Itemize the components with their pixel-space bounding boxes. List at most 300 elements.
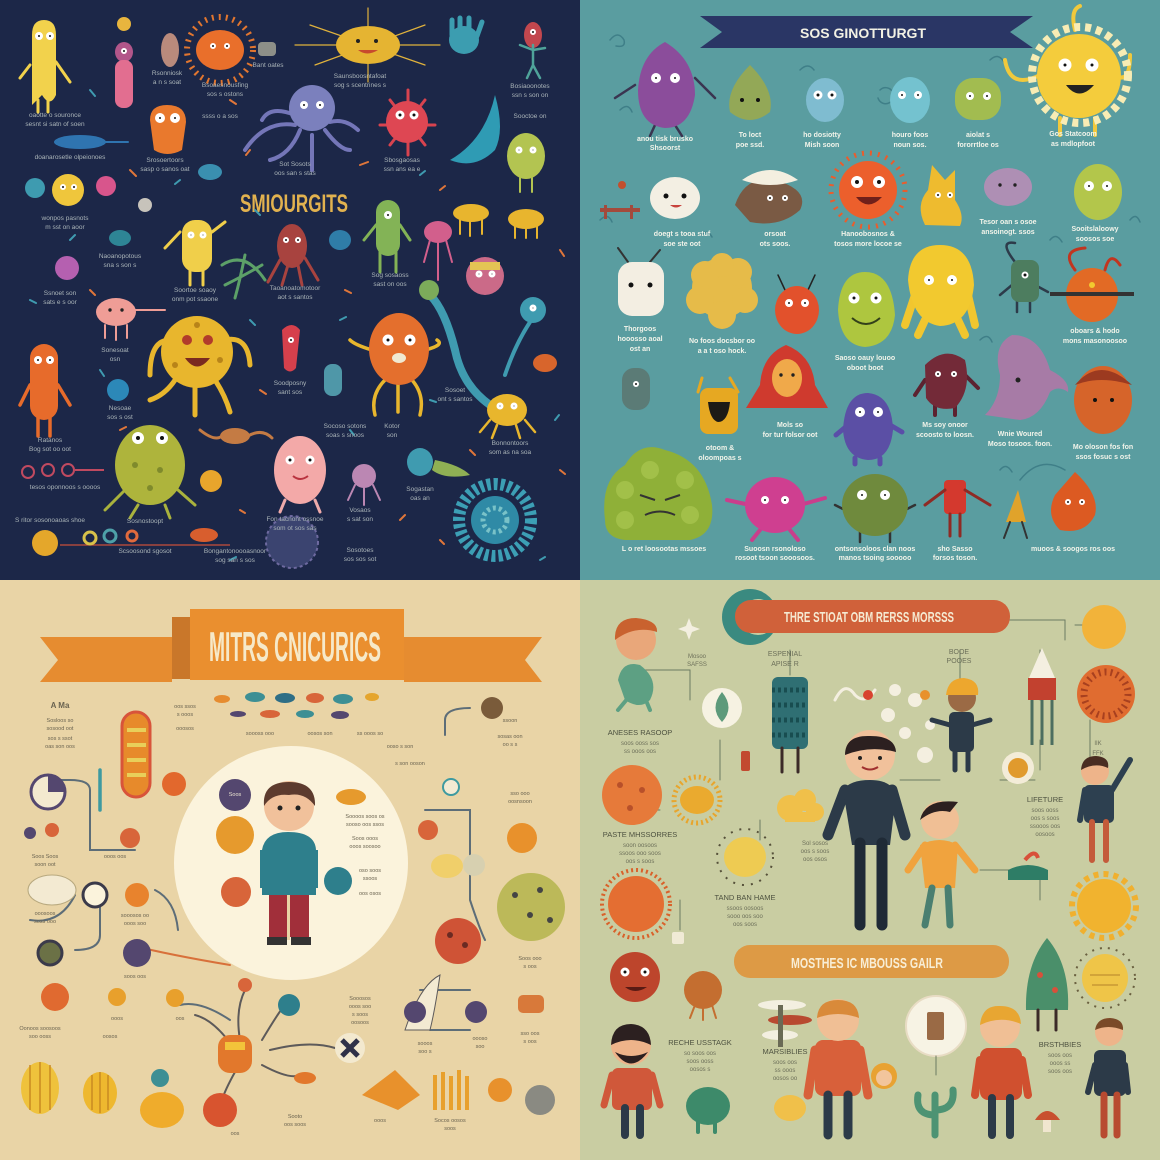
text labels: dark panel: Kotor xyxy=(384,423,401,430)
text labels: sage panel: BOOE xyxy=(949,649,969,656)
text labels: tan panel: s oos xyxy=(523,1039,537,1045)
text labels: dark panel: ont s santos xyxy=(437,396,473,403)
text labels: teal panel: otoom & xyxy=(706,445,734,452)
text labels: dark panel: Sot Sosots xyxy=(279,161,311,168)
section pill xyxy=(734,945,1009,978)
text labels: dark panel: Taoanoatomotoor xyxy=(270,285,321,292)
person: small orange hair xyxy=(932,678,990,770)
text labels: dark panel: Fon tacnont ossnoe xyxy=(266,516,324,523)
monster: big yellow cheese xyxy=(150,316,250,415)
text labels: sage panel: oosos s xyxy=(690,1067,710,1073)
text labels: dark panel: sesnt si satn of soen xyxy=(25,121,85,128)
text labels: teal panel: oboars & hodo xyxy=(1070,328,1120,335)
text labels: sage panel: ESPENIAL xyxy=(768,651,802,658)
panel: teal monsters xyxy=(580,0,1160,580)
microbe: orange sun xyxy=(187,17,253,83)
text labels: dark panel: Bosiaoonotes xyxy=(510,83,550,90)
small orange blob right xyxy=(533,354,557,372)
text labels: tan panel: ooso s son xyxy=(387,744,413,750)
microbe: blue small xyxy=(329,230,351,250)
monster: green square xyxy=(955,78,1001,120)
text labels: sage panel: oosoos xyxy=(1035,832,1055,838)
monster: yellow black-mouth xyxy=(698,378,738,434)
text labels: tan panel: oosos xyxy=(103,1034,118,1040)
monster: golden cluster xyxy=(686,253,758,329)
icon: green bowl xyxy=(1008,853,1048,880)
text labels: teal panel: L o ret loosootas mssoes xyxy=(622,546,706,553)
text labels: dark panel: Bsoaesnousfing xyxy=(202,82,249,89)
text labels: sage panel: BRSTHBIES xyxy=(1039,1040,1081,1049)
text labels: dark panel: som ot sos sas xyxy=(273,525,317,532)
text labels: dark panel: Bonnontoors xyxy=(492,440,529,447)
text labels: tan panel: ooosos xyxy=(176,726,194,732)
text labels: dark panel: Sonesoat xyxy=(101,347,129,354)
monster: green big grin xyxy=(838,272,895,347)
text labels: sage panel: ssoos ooo soos xyxy=(619,851,661,857)
microbe: yellow sunburst right xyxy=(1072,874,1136,938)
microbe: teal curved xyxy=(450,95,500,163)
text labels: tan panel: ssoos xyxy=(363,876,377,882)
title: SMIOURGITS: SMIOURGITS xyxy=(240,190,348,218)
text labels: dark panel: S ritor sosonoaoas shoe xyxy=(15,517,85,524)
text labels: tan panel: ooos soo xyxy=(349,1004,371,1010)
figure: red tower xyxy=(1028,648,1056,745)
monster: red small xyxy=(282,325,300,372)
text labels: dark panel: Sosotoes xyxy=(346,547,374,554)
text labels: dark panel: aot s santos xyxy=(277,294,313,301)
text labels: tan panel: Socos oosos xyxy=(434,1118,466,1124)
microbe: brown fuzzy xyxy=(684,971,722,1020)
text labels: dark panel: Bog sot oo oot xyxy=(29,446,71,453)
person: man with blue sweater xyxy=(1088,1018,1128,1135)
microbe: golden oval xyxy=(295,8,440,82)
text labels: tan panel: ooos oos xyxy=(104,854,126,860)
nest: dark blue tangle xyxy=(266,516,318,568)
monster: lilac trunk xyxy=(985,335,1068,420)
text labels: tan panel: soon oot xyxy=(34,862,56,868)
badge: drink icon xyxy=(906,996,966,1075)
text labels: teal panel: Sooitslaloowy xyxy=(1071,226,1119,233)
text labels: tan panel: ooosoos xyxy=(35,911,56,917)
text labels: teal panel: orsoat xyxy=(764,231,786,238)
sun: yellow circle xyxy=(1082,605,1126,649)
squiggle cluster xyxy=(835,684,935,763)
text labels: teal panel: soosos soe xyxy=(1076,236,1114,243)
text labels: sage panel: RECHE USSTAGK xyxy=(668,1038,732,1047)
text labels: dark panel: soas s snoos xyxy=(326,432,365,439)
text labels: dark panel: oaotte o souronce xyxy=(29,112,81,119)
monster: orange round xyxy=(150,105,186,154)
panel: tan human body microbes xyxy=(0,580,580,1160)
monster: white xyxy=(650,177,700,219)
section pill: MOSTHES IC MBOUSS GAILR xyxy=(791,955,943,972)
text labels: teal panel: poe ssd. xyxy=(736,142,764,149)
title banner xyxy=(700,16,1033,48)
text labels: teal panel: hooosso aoal xyxy=(617,336,663,343)
text labels: teal panel: manos tsoing sooooo xyxy=(839,555,911,562)
text labels: teal panel: oloompoas s xyxy=(698,455,742,462)
person: boy orange xyxy=(908,801,975,925)
small head badge xyxy=(871,1063,897,1089)
text labels: teal panel: Shsoorst xyxy=(650,145,681,152)
monster: pink round xyxy=(466,257,504,295)
monster: pink spiky xyxy=(727,477,825,540)
text labels: teal panel: a a t oso hock. xyxy=(698,348,746,355)
text labels: sage panel: soon oosoos xyxy=(623,843,657,849)
text labels: teal panel: Mo oloson fos fon xyxy=(1073,444,1133,451)
monster: tall pink xyxy=(115,17,133,108)
text labels: dark panel: Naoanopotous xyxy=(99,253,142,260)
monster: orange furry xyxy=(1074,366,1132,434)
monster: lilac small xyxy=(348,464,380,505)
text labels: teal panel: ansoinogt. ssos xyxy=(981,229,1035,236)
person: orange shirt man xyxy=(808,999,868,1135)
text labels: dark panel: onm pot ssaone xyxy=(172,296,219,303)
panel: sage people and microbes xyxy=(580,580,1160,1160)
text labels: sage panel: TAND BAN HAME xyxy=(714,893,776,902)
monster: teal textured xyxy=(772,677,808,772)
text labels: tan panel: ooos soo xyxy=(124,921,146,927)
text labels: dark panel: Nesoae xyxy=(109,405,132,412)
figure: mushroom stack xyxy=(758,1000,812,1047)
panel: dark navy microbes xyxy=(0,0,580,580)
text labels: tan panel: Sooto xyxy=(288,1114,302,1120)
text labels: tan panel: sooso oos ssos xyxy=(346,822,384,828)
monster: small dark bottle xyxy=(622,368,650,410)
text labels: dark panel xyxy=(15,62,550,564)
text labels: dark panel: son xyxy=(387,432,398,439)
text labels: dark panel: Bongantonoooasnoor xyxy=(204,548,267,555)
text labels: tan panel: s son ooson xyxy=(395,761,425,767)
bacterium: blue capsule xyxy=(54,135,128,149)
text labels: sage panel: APISE R xyxy=(771,661,799,668)
monster: green oval xyxy=(507,133,545,192)
text labels: dark panel: Rsonniosk xyxy=(152,70,183,77)
text labels: sage panel: soos ooss xyxy=(1031,808,1059,814)
title pill top xyxy=(722,589,1010,645)
right lower microbes xyxy=(404,975,555,1115)
text labels: dark panel: wonpos pasnots xyxy=(41,215,89,222)
text labels: tan panel: A Ma xyxy=(51,701,70,710)
monster: red cape xyxy=(746,345,828,408)
text labels: tan panel: sooos xyxy=(418,1041,433,1047)
text labels: teal panel: Tesor oan s osoe xyxy=(979,219,1037,226)
text labels: teal panel: rosoot tsoon sooosoos. xyxy=(735,555,815,562)
text labels: dark panel: Sooctoe on xyxy=(514,113,547,120)
text labels: tan panel: Sosloos so xyxy=(47,718,73,724)
text labels: teal panel: doegt s tooa stuf xyxy=(654,231,711,238)
text labels: tan panel: s ooos xyxy=(177,712,193,718)
person: boy waving xyxy=(1080,756,1130,860)
person: central figure xyxy=(260,781,318,945)
text labels: dark panel: sats e s oor xyxy=(43,299,78,306)
text labels: sage panel: oos osos xyxy=(803,857,827,863)
text labels: dark panel: ssn s son on xyxy=(512,92,549,99)
text labels: dark panel: Socoso sotons xyxy=(324,423,367,430)
text labels: dark panel: sog san s sos xyxy=(215,557,256,564)
text labels: tan panel: soss ooo xyxy=(34,919,56,925)
text labels: tan panel: Oonoos soosoos xyxy=(19,1026,61,1032)
text labels: dark panel: Sosoet xyxy=(445,387,465,394)
text labels: teal panel: Suoosn rsonoloso xyxy=(744,546,806,553)
circle: clock xyxy=(28,875,151,967)
microbe: blue small dot xyxy=(107,379,129,401)
monster: red couple xyxy=(925,480,1027,538)
text labels: dark panel: Sbosgaosas xyxy=(384,157,421,164)
flower microbe: teal xyxy=(459,484,531,556)
text labels: tan panel: ooos xyxy=(111,1016,123,1022)
microbes row bottom left xyxy=(41,983,184,1011)
text labels: tan panel: soo s xyxy=(418,1049,432,1055)
beaded strands top xyxy=(214,692,379,719)
title banner: SOS GINOTTURGT xyxy=(800,25,926,41)
microbe: orange textured xyxy=(1077,665,1135,723)
monster: brown capped xyxy=(735,170,802,224)
monster: small brown xyxy=(161,33,179,67)
text labels: teal panel: Mish soon xyxy=(805,142,839,149)
text labels: tan panel: Sooosos xyxy=(349,996,371,1002)
small yellow clouds xyxy=(777,789,824,822)
monster: purple blue xyxy=(836,393,902,464)
text labels: dark panel: Vosaos xyxy=(349,507,371,514)
red small marker xyxy=(741,751,750,771)
text labels: dark panel: Soortoe soaoy xyxy=(174,287,217,294)
text labels: teal panel: muoos & soogos ros oos xyxy=(1031,546,1115,553)
text labels: teal panel: Moso tosoos. foon. xyxy=(988,441,1052,448)
icon cluster left xyxy=(24,772,186,848)
monster: lilac xyxy=(984,168,1032,206)
text labels: sage panel: soos ooss xyxy=(686,1059,714,1065)
text labels: dark panel: oas an xyxy=(410,495,430,502)
text labels: sage panel: soos oos xyxy=(1048,1069,1072,1075)
person: tall man xyxy=(828,730,905,925)
monster: green leaf xyxy=(729,65,771,120)
monster: big yellow xyxy=(905,245,975,335)
monster: big green xyxy=(105,425,195,518)
text labels: sage panel: Mosoo xyxy=(688,654,707,660)
monster: yellow spider xyxy=(480,394,535,438)
text labels: tan panel: Soos xyxy=(229,792,242,798)
monster: orange left tall xyxy=(20,344,70,436)
monster: orange hat xyxy=(1050,248,1134,322)
microbes: yellow jellyfish pair xyxy=(453,204,544,238)
title ribbon: MITRS CNICURICS xyxy=(209,623,381,670)
text labels: tan panel: oso soos xyxy=(359,868,381,874)
small grey icon xyxy=(672,932,684,944)
yellow striped capsules xyxy=(21,1062,184,1128)
microbe: orange spiky left xyxy=(602,870,670,938)
text labels: tan panel: oo s s xyxy=(503,742,518,748)
monster: olive xyxy=(835,474,915,542)
monster: big pink xyxy=(274,436,326,512)
text labels: tan panel: soo ooss xyxy=(29,1034,51,1040)
monster: brown flying xyxy=(200,428,272,444)
text labels: tan panel: Soos ooo xyxy=(518,956,542,962)
text labels: tan panel: oosoos xyxy=(351,1020,369,1026)
text labels: sage panel: ooos ss xyxy=(1050,1061,1070,1067)
text labels: teal panel xyxy=(617,131,1133,562)
text labels: teal panel: scoosto to loosn. xyxy=(916,432,974,439)
text labels: dark panel: sant sos xyxy=(278,389,303,396)
text labels: teal panel: Mols so xyxy=(777,422,803,429)
text labels: teal panel: No foos docsbor oo xyxy=(689,338,755,345)
text labels: teal panel: ost an xyxy=(630,346,650,353)
badge: orange circle xyxy=(1002,752,1034,784)
small microbes left xyxy=(25,164,222,280)
monster: yellow blob left xyxy=(52,174,84,206)
text labels: tan panel: sosas oon xyxy=(497,734,523,740)
text labels: tan panel: oosos son xyxy=(307,731,333,737)
chain: bottom circles xyxy=(32,528,230,556)
small mushroom xyxy=(1035,1111,1060,1132)
text labels: tan panel: oos ssos xyxy=(174,704,196,710)
text labels: tan panel: oooso xyxy=(472,1036,488,1042)
monster: red circle face xyxy=(610,952,660,1002)
microbe: green squiggle xyxy=(222,255,265,298)
monster: green dino xyxy=(686,1087,730,1132)
text labels: tan panel: oosnsoon xyxy=(508,799,532,805)
text labels: sage panel xyxy=(603,649,1104,1082)
microbe: pink jelly xyxy=(424,221,452,280)
text labels: sage panel: oos s soos xyxy=(626,859,654,865)
text labels: sage panel: oos s soos xyxy=(1031,816,1059,822)
text labels: tan panel: sos s ssot xyxy=(48,736,73,742)
text labels: dark panel: m sst on aoor xyxy=(45,224,86,231)
text labels: sage panel: oosos oo xyxy=(773,1076,798,1082)
person: blond man red shirt xyxy=(975,1006,1028,1135)
text labels: tan panel: soooss ooo xyxy=(246,731,274,737)
circle badges around person xyxy=(216,779,366,907)
text labels: teal panel: houro foos xyxy=(892,132,928,139)
worm: teal xyxy=(419,280,490,405)
monster: yellow sun xyxy=(1005,6,1130,135)
text labels: tan panel: sooosos oo xyxy=(121,913,149,919)
text labels: teal panel: ontsonsoloos clan noos xyxy=(835,546,915,553)
monster: yellow arms xyxy=(165,220,225,285)
monster: big green lump xyxy=(604,447,712,540)
monster: green bright xyxy=(1074,164,1122,220)
text labels: sage panel: ss ooos xyxy=(775,1068,795,1074)
text labels: teal panel: soe ste oot xyxy=(664,241,701,248)
microbe: pink jelly left xyxy=(96,298,165,340)
text labels: dark panel: sasp o sanos oat xyxy=(140,166,190,173)
microbe: yellow speckled xyxy=(717,829,773,885)
text labels: dark panel: Bant oates xyxy=(252,62,284,69)
monster: tall yellow xyxy=(20,20,70,112)
text labels: dark panel: ssn ans ea e xyxy=(384,166,421,173)
text labels: dark panel: doanarosetle olpeionoes xyxy=(35,154,106,161)
text labels: teal panel: anou tisk brusko xyxy=(637,136,693,143)
text labels: dark panel: Srosoertoors xyxy=(146,157,184,164)
monster: orange centre xyxy=(350,313,439,415)
text labels: tan panel: ooos xyxy=(374,1118,386,1124)
monster: green bacterium xyxy=(364,200,410,272)
text labels: teal panel: Wnie Woured xyxy=(998,431,1042,438)
monster: purple xyxy=(615,42,715,136)
text labels: teal panel: Hanoobosnos & xyxy=(841,231,895,238)
text labels: sage panel: so soos oos xyxy=(684,1051,716,1057)
text labels: dark panel: Ssnoet son xyxy=(44,290,77,297)
small robot xyxy=(258,42,276,56)
monster: red stick xyxy=(520,22,545,78)
text labels: teal panel: To loct xyxy=(739,132,762,139)
text labels: tan panel: sso oos xyxy=(521,1031,540,1037)
text labels: sage panel: SAFSS xyxy=(687,662,707,668)
text labels: teal panel: oboot boot xyxy=(847,365,884,372)
monster: dark green xyxy=(1000,243,1048,312)
text labels: tan panel: soo xyxy=(476,1044,484,1050)
monster: white square xyxy=(618,248,664,316)
text labels: sage panel: Sol sosos xyxy=(802,841,828,847)
text labels: sage panel: PASTE MHSSORRES xyxy=(603,830,677,839)
text labels: tan panel: oas son oos xyxy=(45,744,75,750)
text labels: sage panel: ssooos oos xyxy=(1030,824,1060,830)
text labels: dark panel: oos san s stas xyxy=(274,170,317,177)
text labels: sage panel: FFK xyxy=(1092,751,1104,757)
text labels: teal panel: tosos more locoe se xyxy=(834,241,902,248)
text labels: dark panel: s sat son xyxy=(347,516,373,523)
monster: red tentacled xyxy=(268,224,318,285)
microbe: yellow striped right xyxy=(1075,948,1135,1008)
text labels: tan panel: Soos Soos xyxy=(32,854,59,860)
text labels: dark panel: osn xyxy=(110,356,121,363)
title pill top: THRE STIOAT OBM RERSS MORSSS xyxy=(784,609,954,626)
text labels: sage panel: oos soos xyxy=(733,922,757,928)
monster: green cone xyxy=(1026,938,1068,1030)
microbe: teal hand xyxy=(449,18,482,54)
text labels: sage panel: ss ooos oos xyxy=(624,749,656,755)
text labels: tan panel: Soos ooos xyxy=(352,836,378,842)
monster: orange pointy xyxy=(1051,472,1096,531)
right side microbes xyxy=(418,697,565,964)
text labels: teal panel: Gos Statcoom xyxy=(1049,131,1097,138)
text labels: dark panel: tesos oponnoos s oooos xyxy=(30,484,101,491)
scattered specks xyxy=(30,90,565,560)
person: boy with green body xyxy=(615,618,657,710)
text labels: dark panel: Sog sosaoss xyxy=(371,272,409,279)
microbe: circle left orange xyxy=(602,765,662,825)
text labels: dark panel: Ratanos xyxy=(38,437,63,444)
text labels: dark panel: sos s ost xyxy=(107,414,133,421)
text labels: teal panel: ots soos. xyxy=(760,241,790,248)
text labels: tan panel: soos oos xyxy=(124,974,146,980)
microbe: blue squid xyxy=(245,85,358,170)
text labels: teal panel: Ms soy onoor xyxy=(922,422,968,429)
text labels: sage panel: soos oos xyxy=(1048,1053,1072,1059)
text labels: sage panel: IIK xyxy=(1094,741,1102,747)
monster: blue small xyxy=(806,78,844,122)
monster: light blue xyxy=(890,77,930,123)
text labels: sage panel: oos s soos xyxy=(801,849,829,855)
text labels: dark panel: sos s ostons xyxy=(207,91,244,98)
small yellow blob xyxy=(774,1095,806,1121)
monster: teal small centre xyxy=(324,364,342,396)
title ribbon xyxy=(40,609,542,682)
text labels: sage panel: LIFETURE xyxy=(1027,795,1063,804)
monster: yellow cat xyxy=(921,165,962,226)
text labels: sage panel: ANESES RASOOP xyxy=(608,728,672,737)
object: red bench xyxy=(600,181,640,219)
central hub microbe with branches xyxy=(195,978,335,1127)
text labels: teal panel: forsos toson. xyxy=(933,555,977,562)
microbe: red circle xyxy=(380,90,435,155)
text labels: tan panel: Soooos soos os xyxy=(345,814,385,820)
icon: sparkle xyxy=(678,618,700,640)
text labels: teal panel: as mdlopfoot xyxy=(1051,141,1096,148)
text labels: tan panel: oos xyxy=(231,1131,240,1137)
text labels: sage panel: soos oos xyxy=(773,1060,797,1066)
text labels: tan panel: ssoon xyxy=(503,718,517,724)
